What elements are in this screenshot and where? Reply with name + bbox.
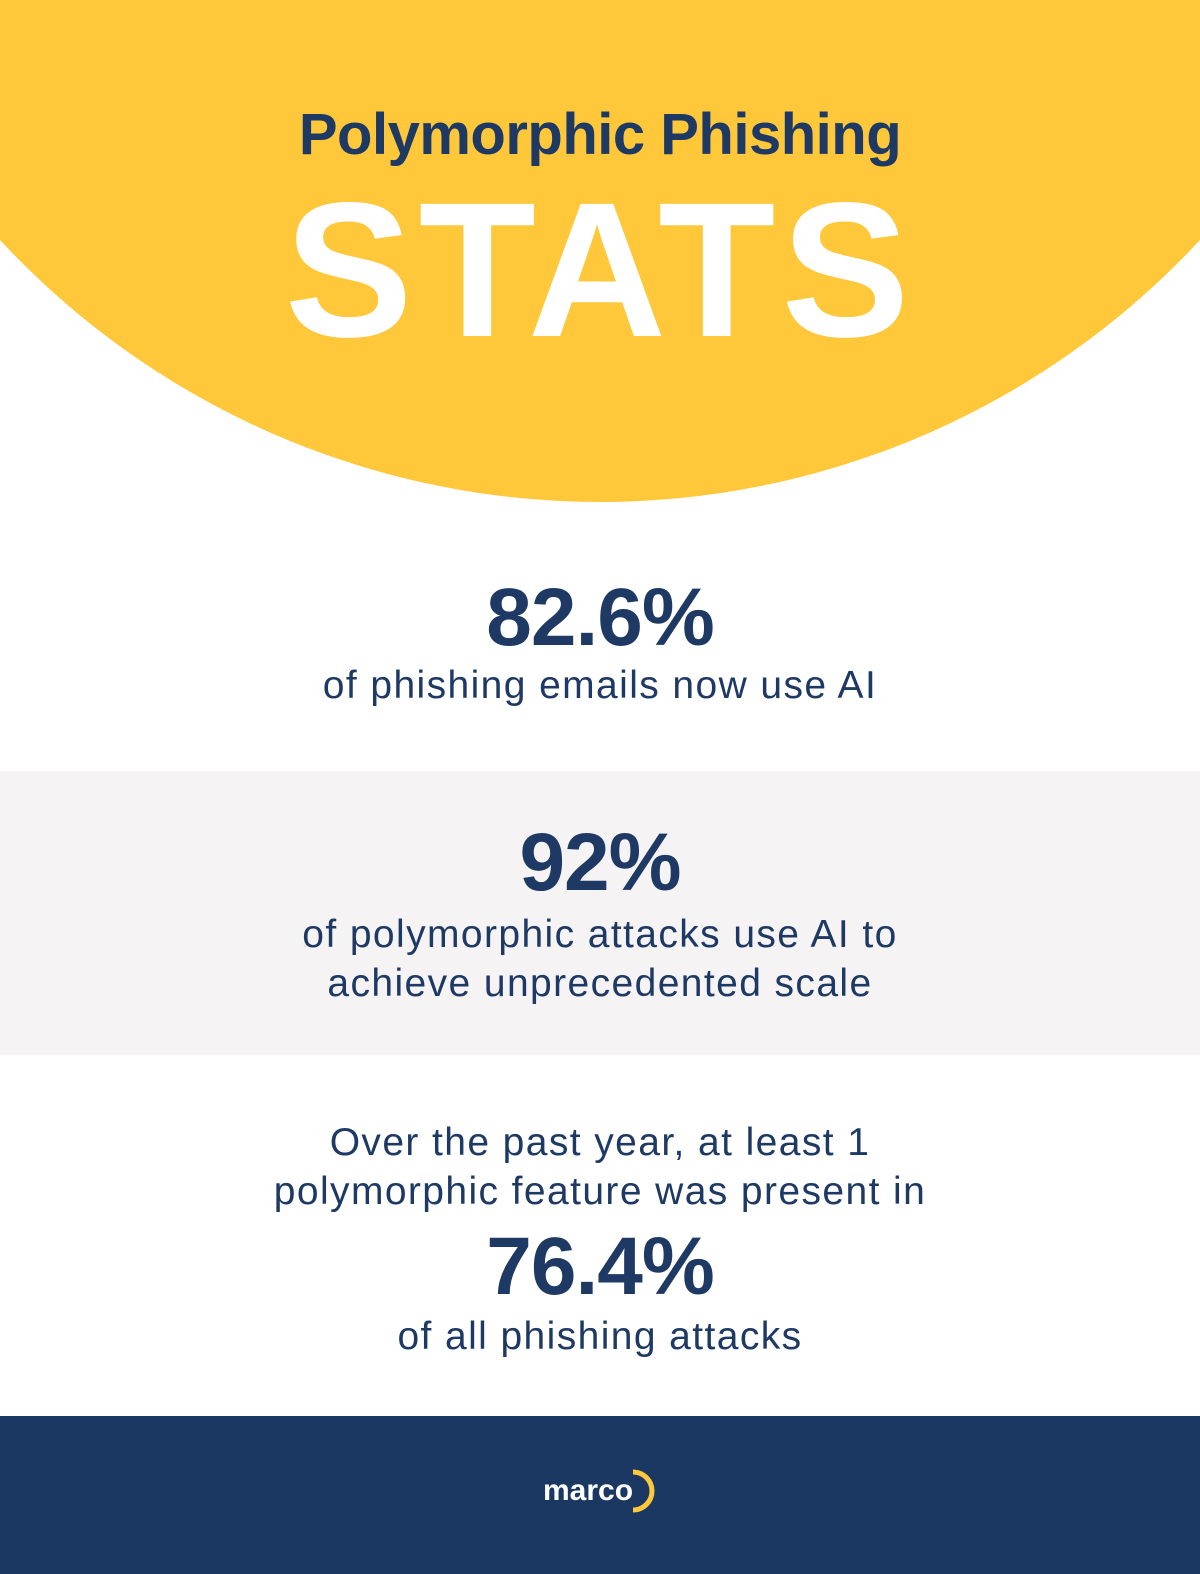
stat 3: of all phishing attacks bbox=[397, 1315, 803, 1358]
logo: marco bbox=[543, 1474, 633, 1507]
yellow header circle bbox=[0, 0, 1200, 502]
stat 2 bbox=[302, 817, 898, 1005]
stat 2: achieve unprecedented scale bbox=[327, 962, 873, 1005]
stat 2: 92% bbox=[519, 817, 681, 908]
stat 1 bbox=[323, 572, 877, 707]
footer bbox=[0, 1416, 1200, 1574]
gray band bbox=[0, 771, 1200, 1055]
stat 3: Over the past year, at least 1 bbox=[330, 1121, 870, 1164]
title: Polymorphic Phishing bbox=[299, 102, 901, 167]
stat 1: 82.6% bbox=[486, 572, 714, 663]
stat 3: 76.4% bbox=[486, 1221, 714, 1312]
logo bbox=[543, 1470, 654, 1512]
STATS heading: STATS bbox=[285, 162, 915, 377]
stat 2: of polymorphic attacks use AI to bbox=[302, 913, 898, 956]
stat 1: of phishing emails now use AI bbox=[323, 664, 877, 707]
stat 3 bbox=[274, 1121, 926, 1358]
stat 3: polymorphic feature was present in bbox=[274, 1170, 926, 1213]
